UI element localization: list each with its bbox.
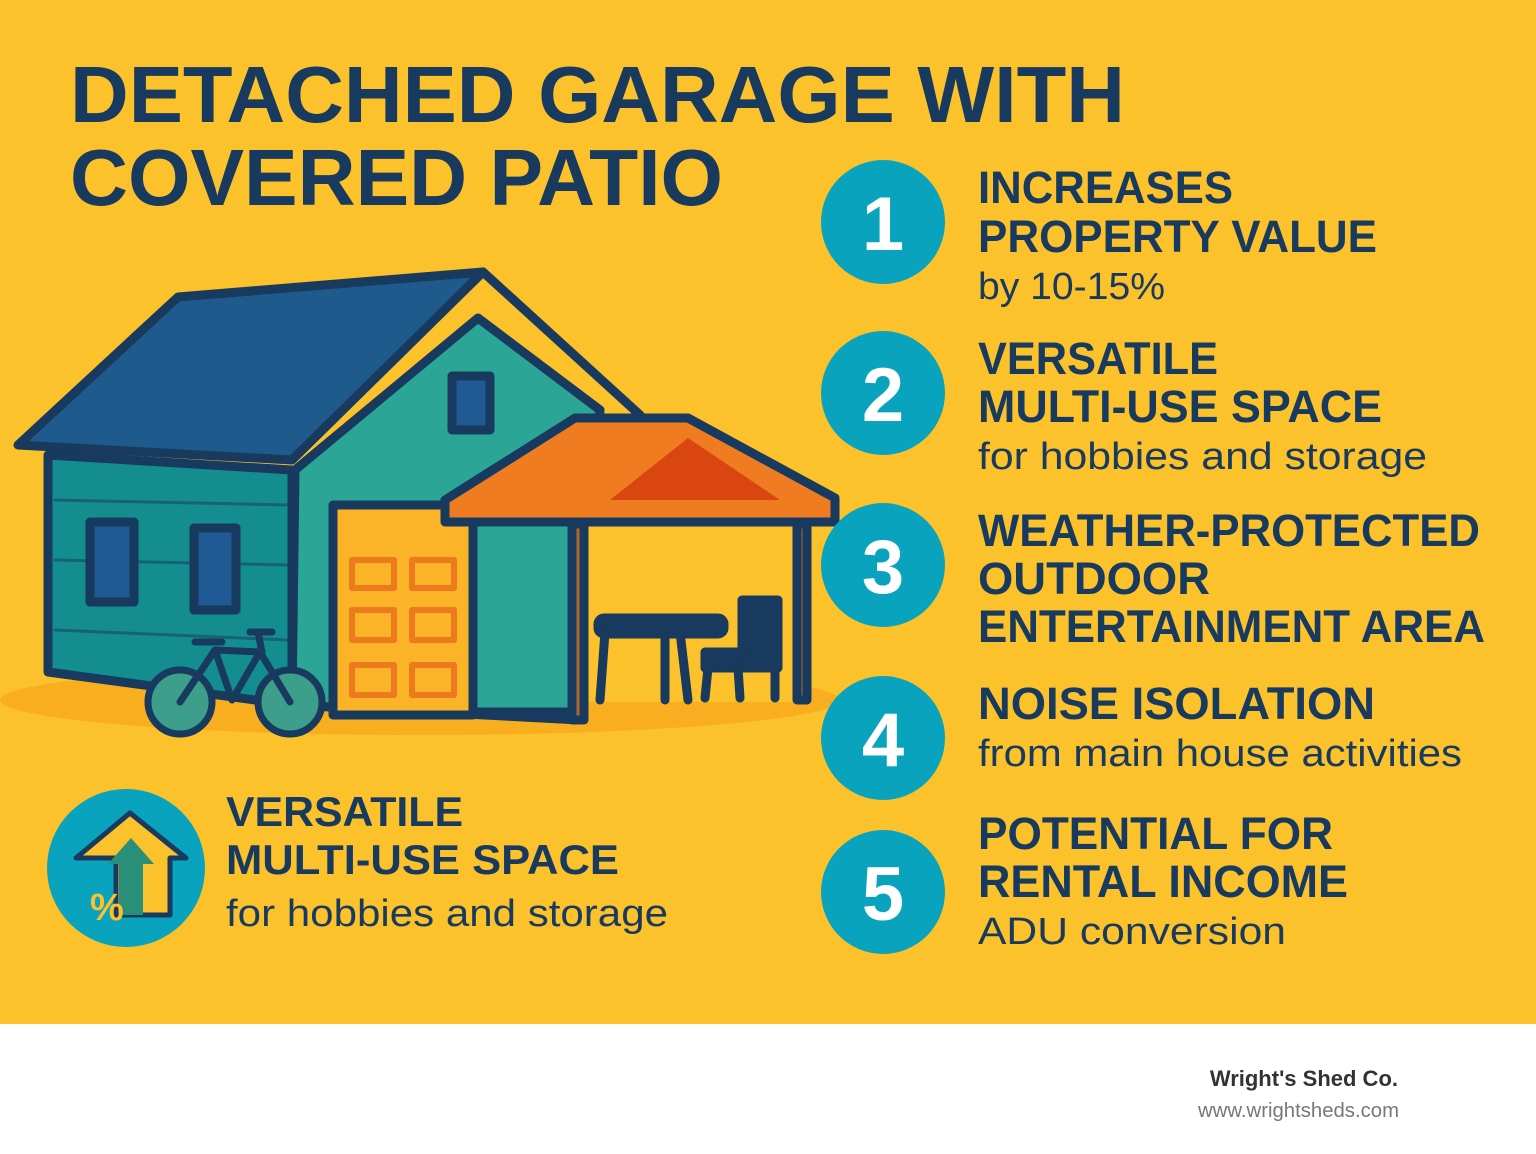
icon: house with arrow and percent: [47, 789, 205, 947]
footer: [1197, 1066, 1399, 1122]
item 2: MULTI-USE SPACE: [978, 381, 1382, 432]
bottom-left feature: VERSATILE: [226, 788, 463, 835]
roof: [18, 272, 483, 460]
title: COVERED PATIO: [70, 133, 723, 222]
item 3: ENTERTAINMENT AREA: [978, 601, 1485, 652]
left wall: [48, 455, 292, 705]
title: DETACHED GARAGE WITH: [70, 50, 1125, 139]
illustration: garage with patio: [0, 272, 840, 735]
item 3: OUTDOOR: [978, 553, 1210, 604]
item 1: 1: [862, 182, 904, 267]
bottom-left feature: [47, 788, 668, 947]
footer: Wright's Shed Co.: [1210, 1066, 1398, 1091]
item 1: [821, 160, 1377, 308]
item 2: for hobbies and storage: [978, 436, 1427, 478]
item 4: from main house activities: [978, 733, 1462, 775]
item 2: VERSATILE: [978, 333, 1218, 384]
front wall: [292, 318, 600, 720]
bottom-left feature: MULTI-USE SPACE: [226, 836, 619, 883]
bicycle: [148, 632, 322, 734]
table: [598, 618, 724, 634]
title: [70, 50, 1125, 222]
item 1: PROPERTY VALUE: [978, 211, 1377, 262]
footer: www.wrightsheds.com: [1197, 1100, 1399, 1122]
posts: [572, 524, 584, 720]
item 2: [821, 331, 1427, 478]
item 4: NOISE ISOLATION: [978, 678, 1375, 729]
icon: house with arrow and percent: %: [90, 887, 124, 929]
patio roof: [445, 418, 835, 522]
item 3: [821, 503, 1485, 652]
chair: [705, 600, 778, 668]
item 5: ADU conversion: [978, 911, 1286, 953]
numbered list: [821, 160, 1485, 954]
item 2: 2: [862, 353, 904, 438]
garage door: [333, 505, 473, 715]
item 5: 5: [862, 852, 904, 937]
item 3: WEATHER-PROTECTED: [978, 505, 1480, 556]
item 5: [821, 808, 1348, 954]
patio area: [473, 522, 573, 712]
item 4: 4: [862, 698, 904, 783]
item 5: RENTAL INCOME: [978, 856, 1348, 907]
item 1: INCREASES: [978, 162, 1233, 213]
item 4: [821, 676, 1462, 800]
bottom-left feature: for hobbies and storage: [226, 893, 668, 935]
item 3: 3: [862, 525, 904, 610]
item 1: by 10-15%: [978, 266, 1165, 308]
item 5: POTENTIAL FOR: [978, 808, 1333, 859]
